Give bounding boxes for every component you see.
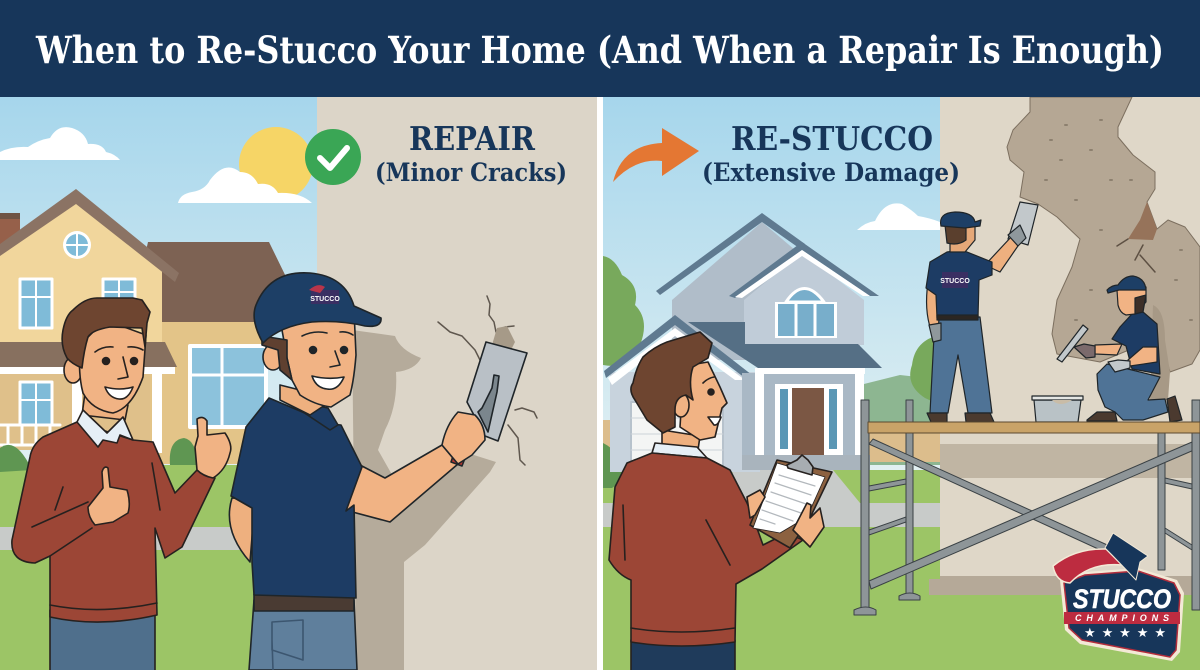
wall	[317, 97, 597, 670]
cap logo: STUCCO	[310, 296, 340, 303]
stars: ★★★★★	[1084, 626, 1166, 641]
repair subheading: (Minor Cracks)	[375, 158, 567, 187]
shirt logo: STUCCO	[940, 278, 970, 285]
grass	[603, 470, 1200, 670]
exposed damage patch	[1007, 97, 1200, 372]
cloud left	[0, 127, 120, 160]
sun	[239, 127, 313, 201]
cracks	[438, 296, 537, 465]
grass	[0, 465, 254, 670]
re-stucco heading: RE-STUCCO	[731, 119, 933, 158]
crack hole	[492, 326, 515, 348]
brand sub: CHAMPIONS	[1075, 613, 1169, 623]
bush left	[603, 443, 622, 488]
title banner	[0, 0, 1200, 97]
worker on scaffold	[926, 202, 1038, 422]
plank	[868, 422, 1200, 433]
tree left	[603, 256, 644, 366]
tree right	[910, 338, 934, 400]
cloud sun	[178, 168, 312, 203]
repair heading: REPAIR	[409, 119, 535, 158]
stucco specks	[1045, 120, 1192, 320]
re-stucco subheading: (Extensive Damage)	[702, 158, 960, 187]
panel: re-stucco	[603, 97, 1200, 670]
fence	[603, 420, 945, 462]
bucket	[1032, 396, 1083, 422]
divider	[597, 97, 603, 670]
swoosh	[1053, 549, 1122, 583]
distant trees	[864, 375, 940, 465]
worker shadow	[352, 330, 496, 670]
wall shadow band	[940, 444, 1200, 478]
cloud right	[857, 203, 940, 230]
worker kneeling	[1057, 276, 1182, 422]
cap logo	[309, 285, 340, 304]
arrow	[613, 128, 699, 182]
wall	[940, 97, 1200, 576]
logo: stucco champions	[1053, 533, 1184, 661]
stucco worker	[229, 273, 527, 670]
brand name: STUCCO	[1073, 584, 1171, 614]
scaffold	[854, 400, 1200, 615]
sidewalk	[0, 527, 240, 550]
soft shadow	[1150, 305, 1170, 400]
trowel	[1105, 533, 1148, 580]
band	[1064, 612, 1180, 624]
sidewalk	[603, 470, 945, 527]
base footing	[929, 576, 1200, 595]
panel: repair	[0, 97, 597, 670]
homeowner with clipboard	[609, 332, 832, 670]
house	[604, 213, 882, 472]
homeowner thumbs up	[12, 298, 231, 670]
icon: check mark	[305, 129, 361, 185]
house	[0, 189, 290, 472]
shirt logo	[940, 272, 970, 288]
exposed brick hole	[1128, 202, 1157, 240]
